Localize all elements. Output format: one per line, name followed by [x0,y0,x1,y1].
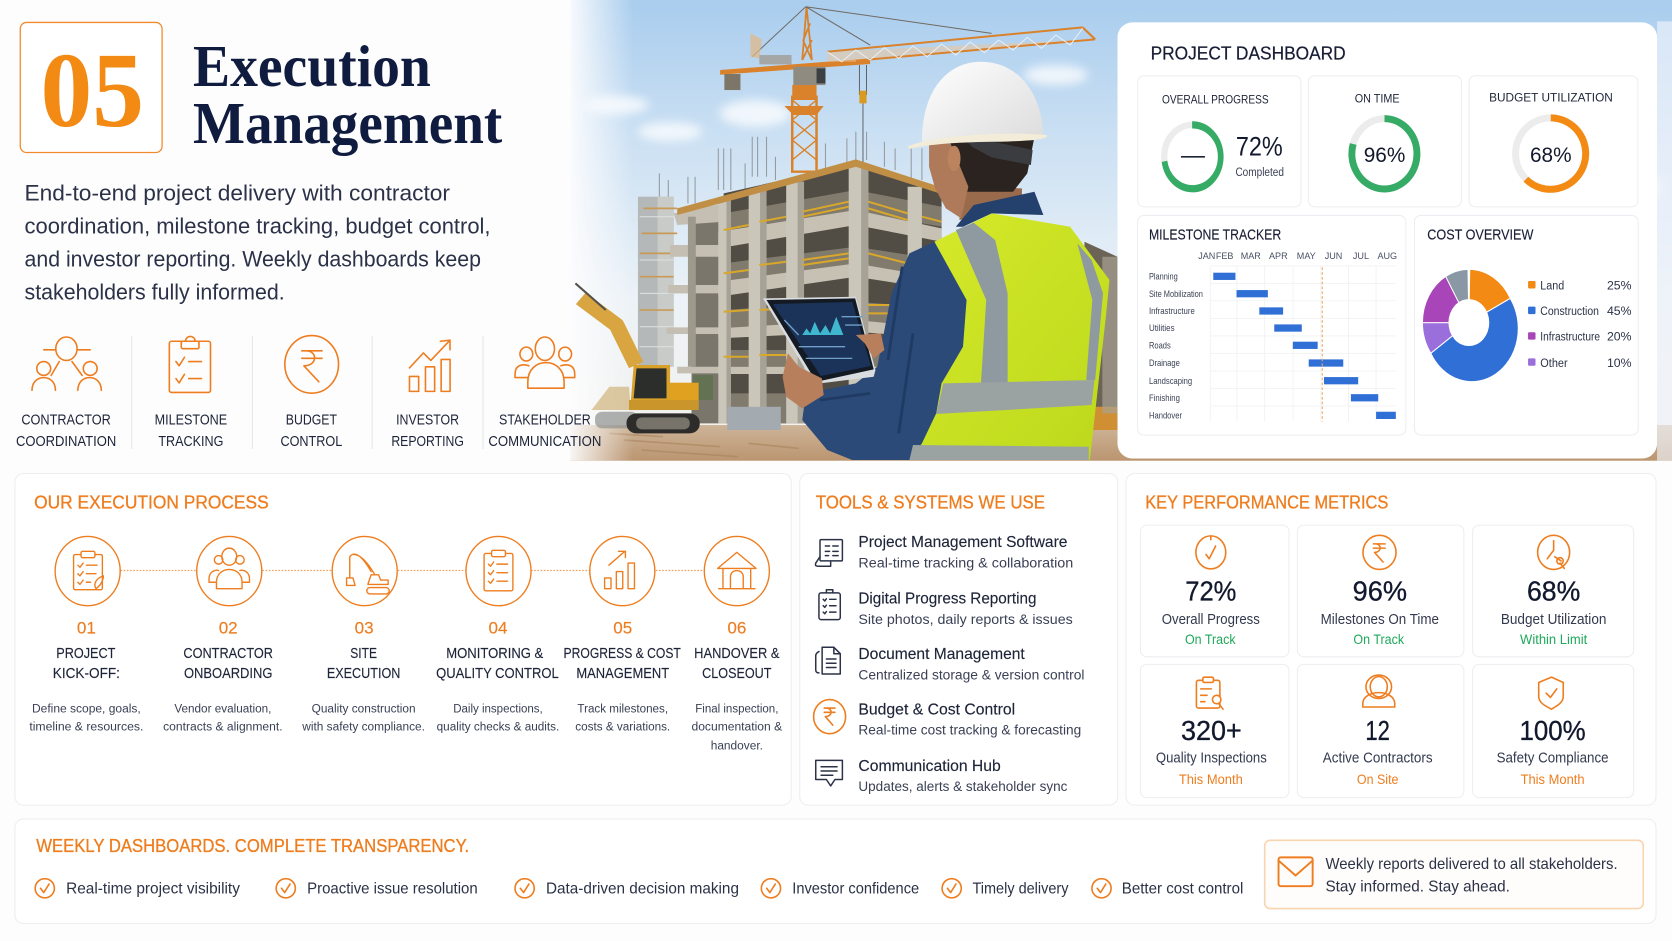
capability: investor reporting: INVESTOR [396,411,459,428]
formwork deck [677,159,942,215]
step 01: Define scope, goals, [32,701,141,715]
gantt bars [1213,273,1396,419]
icon: contractor network [32,337,101,390]
step 05: 05 [613,618,632,637]
icon: documents [816,647,840,674]
metric: budget utilization: Budget Utilization [1501,612,1606,628]
step 06: handover. [711,739,763,753]
process heading: OUR EXECUTION PROCESS [34,492,269,513]
step 05: PROGRESS & COST [564,646,681,662]
tool: budget and cost control [814,700,1081,738]
step 06: HANDOVER & [694,646,780,662]
title: Management [193,90,502,156]
month axis [1198,251,1397,261]
step 06: CLOSEOUT [702,666,772,682]
tool: project management software: Project Management Software [858,534,1067,551]
icon: gauge check [1196,536,1226,569]
step 06: 06 [727,618,746,637]
legend: 10% [1607,356,1632,370]
legend [1528,279,1632,370]
chart: milestone tracker [1138,215,1406,435]
task labels: Infrastructure [1149,306,1195,317]
step 03: EXECUTION [327,666,400,682]
step 03 [301,536,425,733]
metric: active contractors: On Site [1357,771,1399,787]
tool: document management [816,646,1084,682]
tool: project management software [815,534,1073,570]
icon: clipboard [169,336,210,392]
arm [802,242,974,460]
month axis: MAY [1297,251,1316,261]
task labels: Finishing [1149,393,1180,404]
step 03: with safety compliance. [301,719,425,733]
icon: inspection checklist [466,536,531,606]
metric: milestones on time: 96% [1353,575,1407,606]
panel: tools and systems [800,473,1118,805]
legend: Construction [1540,304,1599,318]
description: coordination, milestone tracking, budget control, [25,214,491,239]
title [193,33,502,156]
icon: report clipboard [819,590,840,620]
gauge: on time [1308,76,1461,207]
metric: milestones on time: On Track [1353,631,1404,647]
gauge: budget utilization [1469,76,1638,207]
metric: safety compliance [1473,664,1634,798]
metric: quality inspections: Quality Inspections [1156,750,1267,766]
icon: kick-off clipboard [55,536,120,606]
gauge: on time: 96% [1364,144,1405,167]
capability: milestone tracking: TRACKING [158,433,223,450]
metric: overall progress: On Track [1185,631,1236,647]
description: End-to-end project delivery with contractor [25,181,451,206]
icon: people [197,536,262,606]
capability: stakeholder communication [488,337,601,450]
benefit: timely delivery: Timely delivery [972,881,1069,898]
capability: stakeholder communication: COMMUNICATION [488,433,601,450]
metric: overall progress [1140,525,1289,657]
step 01: 01 [77,618,96,637]
capability: contractor coordination: CONTRACTOR [21,411,111,428]
metric: active contractors: 12 [1365,715,1390,746]
capability: budget control [280,336,342,450]
month axis: APR [1269,251,1288,261]
callout: weekly reports [1265,840,1643,909]
step 01: PROJECT [56,646,116,662]
tool: budget and cost control: Budget & Cost Control [858,701,1015,718]
benefit: investor confidence [761,879,919,898]
tool: digital progress reporting [819,590,1073,627]
metric: budget utilization [1473,525,1634,657]
gauge: budget utilization: 68% [1530,144,1572,167]
metric: overall progress: Overall Progress [1162,612,1260,628]
tools heading: TOOLS & SYSTEMS WE USE [816,492,1045,513]
facade [724,163,942,423]
tool: communication hub [816,758,1067,794]
step 04: quality checks & audits. [437,719,559,733]
tool: digital progress reporting: Digital Progress Reporting [858,591,1036,608]
benefit: better cost control: Better cost control [1122,881,1243,898]
metric: active contractors: Active Contractors [1323,750,1433,766]
gauge: overall progress: 72% [1236,132,1283,162]
step 03: SITE [350,646,377,662]
legend: Infrastructure [1540,330,1600,344]
metric: safety compliance: Safety Compliance [1497,750,1609,766]
dashboard heading: PROJECT DASHBOARD [1151,43,1346,64]
description [25,181,491,305]
photo left fade [565,0,633,461]
step 05: MANAGEMENT [576,666,669,682]
donut chart [1422,269,1518,382]
slabs [718,210,942,374]
callout: weekly reports: Stay informed. Stay ahead. [1325,878,1510,895]
capability: stakeholder communication: STAKEHOLDER [499,411,591,428]
icon: handover building [704,536,769,606]
tool: communication hub: Updates, alerts & stakeholder sync [858,778,1067,794]
metric: milestones on time: Milestones On Time [1321,612,1439,628]
gauge: on time: ON TIME [1355,91,1400,105]
step 02: contracts & alignment. [163,719,283,733]
gauge: overall progress: Completed [1235,166,1284,179]
task labels: Planning [1149,271,1178,282]
excavator [575,283,700,433]
tool: communication hub: Communication Hub [858,758,1001,775]
step 05: costs & variations. [575,719,670,733]
capability: budget control: BUDGET [286,411,337,428]
step 01: timeline & resources. [29,719,143,733]
icon: software screen [815,540,842,566]
metric: quality inspections: 320+ [1181,715,1242,746]
tool: document management: Document Management [858,646,1025,663]
helmet [922,62,1043,142]
step 04: 04 [488,618,507,637]
legend: Land [1540,279,1564,293]
legend: 25% [1607,279,1632,293]
month axis: MAR [1241,251,1261,261]
task labels [1149,271,1203,422]
building [667,159,942,430]
month axis: FEB [1216,251,1233,261]
gauge: overall progress [1138,76,1301,207]
icon: rupee [1363,535,1396,569]
task labels: Roads [1149,341,1171,352]
panel: our execution process [15,473,791,805]
month axis: JUL [1353,251,1369,261]
panel: key performance metrics [1126,473,1656,805]
step 06 [692,536,782,753]
step 04: QUALITY CONTROL [436,666,559,682]
benefit: timely delivery [942,879,1069,898]
tool: project management software: Real-time tracking & collaboration [858,554,1073,570]
step 01 [29,536,143,733]
vest [909,213,1109,460]
tool: budget and cost control: Real-time cost tracking & forecasting [858,722,1081,738]
panel: project dashboard [1118,22,1657,459]
capability: investor reporting [391,340,464,450]
step 05 [564,536,681,733]
left wing [692,217,724,423]
engineer [763,62,1109,460]
step 03: Quality construction [312,701,416,715]
task labels: Drainage [1149,358,1180,369]
description: and investor reporting. Weekly dashboards keep [25,247,481,272]
capability: contractor coordination [16,337,116,450]
title: Execution [193,33,431,99]
panel: weekly dashboards banner [15,819,1656,923]
legend: 45% [1607,304,1632,318]
metric: quality inspections: This Month [1179,771,1243,787]
right building wing [1084,242,1117,430]
icon: rupee [285,336,339,393]
icon: safety shield [1539,677,1563,709]
capability: milestone tracking: MILESTONE [155,411,227,428]
icon: chat bubble [816,760,842,786]
task labels: Site Mobilization [1149,289,1203,300]
metrics heading: KEY PERFORMANCE METRICS [1145,492,1388,513]
step 02: Vendor evaluation, [174,701,271,715]
side tower [638,197,677,367]
icon: envelope [1279,857,1313,886]
metric: budget utilization: Within Limit [1520,631,1587,647]
step 03: 03 [355,618,374,637]
hero photo: construction site with engineer [565,0,1672,461]
hands [856,333,884,358]
step 04 [436,536,559,733]
neck and head [959,187,1022,220]
tool: document management: Centralized storage & version control [858,666,1084,682]
metric: safety compliance: 100% [1520,715,1586,746]
callout: weekly reports: Weekly reports delivered to all stakeholders. [1325,856,1618,873]
section number box: 05 [41,32,144,150]
month axis: JUN [1325,251,1342,261]
capability: budget control: CONTROL [280,433,342,450]
month axis: AUG [1377,251,1397,261]
icon: growth chart [409,340,450,391]
step 02: ONBOARDING [184,666,272,682]
metric: safety compliance: This Month [1521,771,1585,787]
step 06: Final inspection, [695,701,778,715]
rebar [659,132,922,203]
icon: clock search [1538,535,1570,569]
step 02: 02 [219,618,238,637]
legend: Other [1540,356,1568,370]
icon: people group [515,337,575,388]
gauge: budget utilization: BUDGET UTILIZATION [1489,90,1613,104]
step 02: CONTRACTOR [183,646,273,662]
benefit: data-driven decision making: Data-driven decision making [546,881,739,898]
step 02 [163,536,283,733]
description: stakeholders fully informed. [25,280,285,305]
tablet [763,297,875,383]
task labels: Utilities [1149,323,1175,334]
metric: budget utilization: 68% [1527,575,1580,606]
icon: rupee circle [814,700,846,734]
legend: 20% [1607,330,1632,344]
section number box [20,22,162,153]
capability: milestone tracking [155,336,227,450]
icon: inspection clipboard [1196,677,1223,709]
task labels: Handover [1149,411,1183,422]
chart: cost overview: COST OVERVIEW [1427,227,1534,243]
benefit: real-time project visibility: Real-time project visibility [66,881,240,898]
metric: overall progress: 72% [1185,575,1236,606]
lighter back walls [724,190,942,423]
metric: active contractors [1297,664,1464,798]
step 04: MONITORING & [446,646,544,662]
step 04: Daily inspections, [453,701,543,715]
metric: milestones on time [1297,525,1464,657]
step 06: documentation & [692,719,782,733]
chart: cost overview [1414,215,1638,435]
benefit: proactive issue resolution: Proactive issue resolution [307,881,478,898]
crane [720,7,1095,213]
icon: bar chart with arrow [590,536,655,606]
icon: contractor person [1363,675,1395,707]
tool: digital progress reporting: Site photos, daily reports & issues [858,611,1073,627]
task labels: Landscaping [1149,376,1192,387]
chart: milestone tracker: MILESTONE TRACKER [1149,227,1281,243]
gauge: overall progress: OVERALL PROGRESS [1162,92,1269,106]
banner heading: WEEKLY DASHBOARDS. COMPLETE TRANSPARENCY. [36,835,469,856]
capability: contractor coordination: COORDINATION [16,433,116,450]
metric: quality inspections [1140,664,1289,798]
icon: excavator [332,536,397,606]
step 01: KICK-OFF: [53,666,120,682]
month axis: JAN [1198,251,1215,261]
step 05: Track milestones, [577,701,668,715]
benefit: investor confidence: Investor confidence [792,881,919,898]
capability: investor reporting: REPORTING [391,433,464,450]
pillars [718,163,922,423]
benefit: better cost control [1092,879,1243,898]
